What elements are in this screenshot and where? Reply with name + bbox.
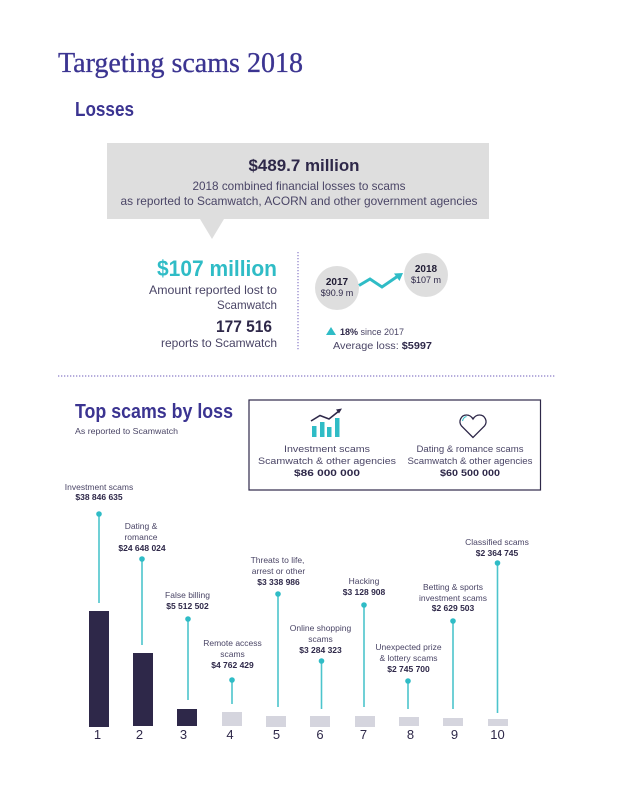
bar 5: threats to life: 5 xyxy=(273,727,280,742)
panel: Scamwatch total: Amount reported lost to xyxy=(149,283,277,297)
bar 4: remote access scams: Remote access xyxy=(203,638,262,648)
bar 7: hacking: Hacking xyxy=(349,576,380,586)
bar 2: dating and romance: $24 648 024 xyxy=(118,543,166,553)
bar 10: classified scams: $2 364 745 xyxy=(476,548,519,558)
bar 6: online shopping scams: 6 xyxy=(316,727,324,742)
title: Targeting scams 2018 xyxy=(58,48,303,79)
bar chart: top scams xyxy=(65,482,529,742)
text: dating and romance scams: $60 500 000 xyxy=(440,468,500,479)
text: investment scams xyxy=(258,444,396,479)
text: investment scams: Scamwatch & other agencies xyxy=(258,456,396,467)
icon: heart xyxy=(460,415,486,438)
callout: combined losses: as reported to Scamwatch, ACORN and other government agencies xyxy=(120,194,478,208)
bar 9: betting and sports: $2 629 503 xyxy=(432,603,475,613)
panel: year comparison xyxy=(315,253,448,352)
bar 9: betting and sports xyxy=(419,582,487,742)
bar 3: false billing: False billing xyxy=(165,590,210,600)
bar 10: classified scams: Classified scams xyxy=(465,537,529,547)
bar 6: online shopping scams xyxy=(290,623,351,742)
icon: investment chart xyxy=(311,408,342,437)
text: dating and romance scams xyxy=(408,444,533,479)
panel: Scamwatch total: 177 516 xyxy=(216,317,272,336)
text: average loss: Average loss: $5997 xyxy=(333,340,432,352)
bar 4: remote access scams xyxy=(203,638,262,742)
bar 5: threats to life: arrest or other xyxy=(252,566,305,576)
icon: 2017 circle: 2017 xyxy=(326,277,349,288)
subheading: As reported to Scamwatch xyxy=(75,426,178,436)
panel: Scamwatch total: Scamwatch xyxy=(217,298,277,312)
bar 8: unexpected prize: 8 xyxy=(407,727,414,742)
bar 3: false billing: 3 xyxy=(180,727,187,742)
bar 1: investment scams xyxy=(65,482,133,742)
bar 8: unexpected prize: & lottery scams xyxy=(379,653,438,663)
panel: Scamwatch total: reports to Scamwatch xyxy=(161,336,277,350)
icon: 2018 circle: 2018 xyxy=(415,264,438,275)
bar 4: remote access scams: 4 xyxy=(226,727,234,742)
arrow: upward trend xyxy=(359,273,403,287)
icon: 2018 circle: $107 m xyxy=(411,275,441,285)
bar 3: false billing xyxy=(165,590,210,742)
icon: 2017 circle xyxy=(315,266,359,310)
bar 9: betting and sports: Betting & sports xyxy=(423,582,483,592)
callout: combined losses xyxy=(107,143,489,239)
bar 5: threats to life xyxy=(251,555,305,742)
callout: combined losses: 2018 combined financial losses to scams xyxy=(192,179,406,193)
text: dating and romance scams: Dating & romance scams xyxy=(416,444,524,455)
panel: Scamwatch total xyxy=(149,256,277,350)
heading: top scams by loss: Top scams by loss xyxy=(75,401,233,423)
bar 8: unexpected prize xyxy=(375,642,442,742)
bar 5: threats to life: $3 338 986 xyxy=(257,577,300,587)
bar 2: dating and romance: 2 xyxy=(136,727,143,742)
panel: Scamwatch total: $107 million xyxy=(157,256,277,281)
bar 4: remote access scams: scams xyxy=(220,649,245,659)
bar 9: betting and sports: investment scams xyxy=(419,593,487,603)
bar 10: classified scams xyxy=(465,537,529,742)
bar 2: dating and romance: Dating & xyxy=(125,521,158,531)
bar 8: unexpected prize: $2 745 700 xyxy=(387,664,430,674)
bar 10: classified scams: 10 xyxy=(490,727,505,742)
text: investment scams: $86 000 000 xyxy=(294,468,360,479)
bar 5: threats to life: Threats to life, xyxy=(251,555,304,565)
bar 7: hacking: $3 128 908 xyxy=(343,587,386,597)
icon: 2017 circle: $90.9 m xyxy=(321,288,353,298)
text: dating and romance scams: Scamwatch & other agencies xyxy=(408,456,533,467)
bar 6: online shopping scams: Online shopping xyxy=(290,623,351,633)
bar 2: dating and romance xyxy=(118,521,166,742)
bar 8: unexpected prize: Unexpected prize xyxy=(375,642,442,652)
bar 1: investment scams: $38 846 635 xyxy=(75,492,123,502)
bar 3: false billing: $5 512 502 xyxy=(166,601,209,611)
bar 4: remote access scams: $4 762 429 xyxy=(211,660,254,670)
bar 7: hacking: 7 xyxy=(360,727,367,742)
bar 1: investment scams: 1 xyxy=(94,727,101,742)
bar 2: dating and romance: romance xyxy=(124,532,158,542)
icon: up triangle xyxy=(326,327,336,335)
icon: 2018 circle xyxy=(404,253,448,297)
text: investment scams: Investment scams xyxy=(284,444,370,455)
callout: combined losses: $489.7 million xyxy=(248,156,360,175)
bar 6: online shopping scams: $3 284 323 xyxy=(299,645,342,655)
bar 7: hacking xyxy=(343,576,386,742)
text: change since 2017: 18% since 2017 xyxy=(340,327,404,338)
bar 1: investment scams: Investment scams xyxy=(65,482,133,492)
heading: losses: Losses xyxy=(75,99,134,121)
bar 9: betting and sports: 9 xyxy=(451,727,458,742)
panel: other agencies xyxy=(249,400,540,490)
bar 6: online shopping scams: scams xyxy=(308,634,333,644)
